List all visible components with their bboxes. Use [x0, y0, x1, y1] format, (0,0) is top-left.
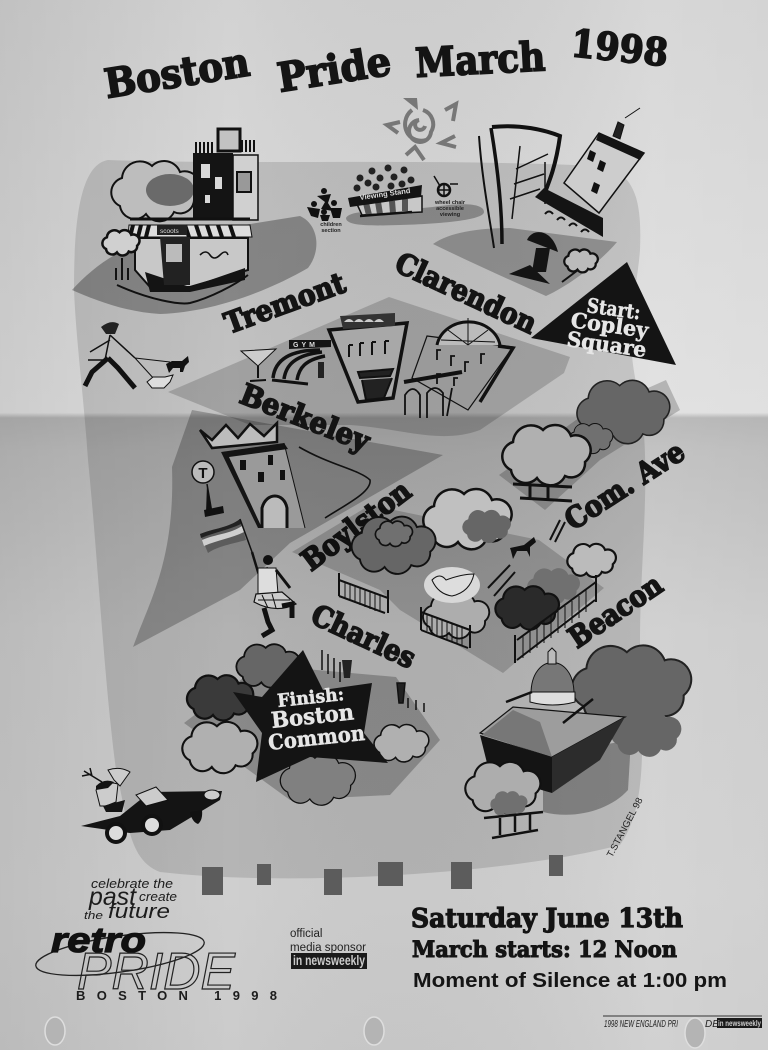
tagline: celebrate the past create the future: the [84, 910, 103, 922]
panel: T station block [133, 410, 443, 647]
icon: rainbow flag [200, 519, 252, 553]
title: Boston [101, 39, 253, 108]
finish star: Boston [270, 699, 355, 734]
panel: State House [465, 645, 691, 838]
panel: viewing stand: wheel chair [434, 200, 466, 206]
panel: viewing stand [346, 164, 484, 225]
artist signature: T.STANGEL 98 [605, 796, 646, 859]
tagline: celebrate the past create the future: celebrate the [91, 876, 173, 891]
street label: Charles: Charles [306, 598, 421, 675]
panel: viewing stand: viewing [440, 212, 460, 218]
map base blob [74, 160, 645, 878]
event details: Moment of Silence at 1:00 pm [413, 970, 727, 992]
panel: start Copley Square: Start: [585, 293, 642, 324]
street label: Beacon: Beacon [562, 567, 669, 655]
panel: Com Ave trees [499, 380, 680, 510]
panel: Boston Common with finish star [182, 644, 440, 805]
footer credit: 1998 NEW ENGLAND PRI [604, 1019, 678, 1030]
panel: Scoots storefront [72, 129, 316, 314]
tagline: celebrate the past create the future [84, 876, 177, 923]
street label: Tremont: Tremont [220, 265, 350, 341]
finish star: Common [267, 720, 366, 755]
panel: viewing stand: Viewing Stand [359, 186, 411, 202]
panel: Copley skyscrapers [433, 108, 644, 296]
title: 1998 [569, 20, 670, 75]
icon: children section [307, 188, 342, 234]
footer credit [603, 1016, 762, 1030]
tagline: celebrate the past create the future: past [88, 883, 137, 911]
media sponsor [290, 928, 367, 969]
media sponsor: media sponsor [290, 942, 366, 954]
panel: gym and middle block: GYM [293, 342, 318, 349]
finish star: Finish: [276, 684, 345, 712]
panel: public garden park [292, 489, 616, 673]
footer credit: DE [705, 1019, 719, 1030]
street label: Com. Ave: Com. Ave [558, 434, 691, 537]
title [101, 20, 670, 108]
panel: viewing stand: accessible [436, 206, 464, 212]
media sponsor: official [290, 928, 322, 940]
icon: children section: section [321, 228, 341, 234]
media sponsor: in newsweekly [293, 952, 365, 968]
logo: retro pride Boston 1998: retro [51, 921, 146, 960]
tagline: celebrate the past create the future: future [108, 901, 170, 923]
event details [411, 904, 727, 992]
event details: Saturday June 13th [411, 904, 683, 934]
street label: Berkeley: Berkeley [235, 377, 375, 459]
panel: Scoots storefront: scoots [160, 228, 180, 235]
icon: children section: children [320, 222, 342, 228]
tagline: celebrate the past create the future: create [139, 889, 177, 904]
logo: retro pride Boston 1998 [33, 921, 277, 1003]
icon: convertible car [81, 768, 222, 842]
logo: retro pride Boston 1998: BOSTON 1998 [76, 988, 277, 1003]
staple dimples [45, 1017, 705, 1048]
icon: sun [387, 98, 456, 160]
icon: man walking dogs [85, 322, 189, 388]
street label: Boylston: Boylston [295, 473, 417, 578]
event details: March starts: 12 Noon [412, 937, 677, 963]
panel: start Copley Square: Square [565, 326, 648, 362]
title: Pride [274, 38, 394, 102]
title: March [414, 33, 546, 87]
finish star [233, 650, 388, 782]
panel: gym and middle block [168, 297, 570, 436]
bottom squares [202, 855, 563, 895]
icon: dancer in kilt [252, 552, 296, 636]
panel: start Copley Square [531, 262, 676, 365]
logo: retro pride Boston 1998: PRIDE [77, 943, 236, 1001]
panel: T station block: T [198, 465, 208, 482]
panel: start Copley Square: Copley [569, 307, 651, 343]
street label: Clarendon: Clarendon [390, 246, 542, 341]
